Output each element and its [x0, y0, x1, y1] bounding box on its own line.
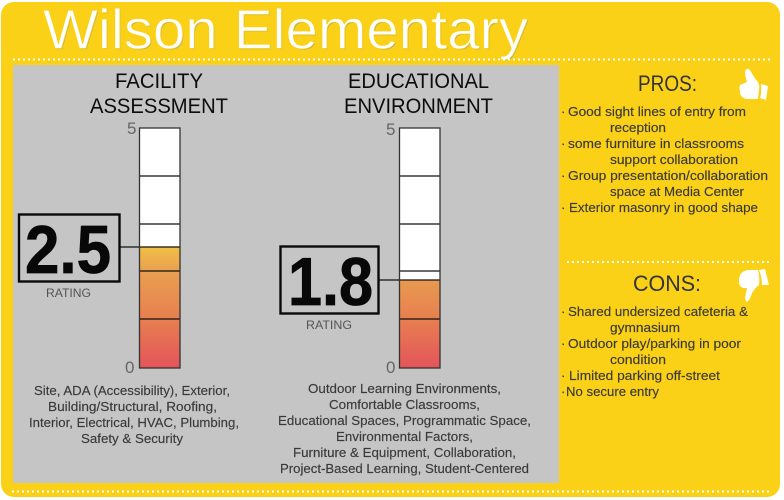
text: facility assessment categories: Site, ADA (Accessibility), Exterior,	[34, 383, 230, 398]
list: cons: No secure entry	[566, 384, 660, 399]
text: educational environment categories: Educational Spaces, Programmatic Space,	[278, 413, 531, 428]
chart: facility assessment gauge: 5	[127, 119, 136, 138]
list: cons: Shared undersized cafeteria &	[568, 304, 748, 319]
text: educational environment categories	[278, 381, 531, 476]
list: cons: ·	[561, 368, 565, 383]
heading: facility assessment	[90, 70, 228, 118]
text: facility assessment categories: Building/Structural, Roofing,	[48, 399, 217, 414]
icon: thumbs up	[740, 69, 768, 100]
list: pros: support collaboration	[610, 152, 738, 167]
list: pros: ·	[561, 200, 565, 215]
heading: educational environment	[344, 70, 493, 118]
chart: facility assessment gauge	[120, 119, 180, 377]
list: pros: Group presentation/collaboration	[568, 168, 768, 183]
heading: facility assessment: FACILITY	[115, 70, 203, 93]
title: Wilson Elementary	[44, 0, 529, 62]
callout: facility rating 2.5: 2.5	[25, 212, 111, 288]
list: pros: space at Media Center	[610, 184, 745, 199]
list: pros: ·	[561, 136, 565, 151]
text: educational environment categories: Environmental Factors,	[336, 429, 473, 444]
chart: facility assessment gauge: 0	[125, 358, 134, 377]
list: pros	[561, 104, 768, 215]
text: educational environment categories: Outdoor Learning Environments,	[308, 381, 501, 396]
icon: thumbs down	[739, 269, 769, 302]
callout: educational rating 1.8: RATING	[306, 318, 352, 332]
list: cons: gymnasium	[610, 320, 680, 335]
list: pros: reception	[610, 120, 666, 135]
heading: cons: CONS:	[633, 271, 701, 296]
text: educational environment categories: Furniture & Equipment, Collaboration,	[293, 445, 516, 460]
list: cons: Outdoor play/parking in poor	[568, 336, 742, 351]
list: pros: Exterior masonry in good shape	[569, 200, 758, 215]
panel: gray ratings panel	[13, 65, 559, 483]
heading: educational environment: ENVIRONMENT	[344, 95, 493, 118]
list: pros: Good sight lines of entry from	[568, 104, 746, 119]
chart: educational environment gauge	[379, 120, 440, 377]
list: cons: ·	[561, 384, 565, 399]
text: educational environment categories: Comfortable Classrooms,	[329, 397, 480, 412]
heading: pros: PROS:	[638, 71, 697, 96]
list: pros: ·	[561, 104, 565, 119]
chart: educational environment gauge: 0	[386, 358, 395, 377]
heading: educational environment: EDUCATIONAL	[348, 70, 489, 93]
callout: facility rating 2.5: RATING	[46, 286, 91, 300]
list: pros: ·	[561, 168, 565, 183]
chart: educational environment gauge: 5	[386, 120, 395, 139]
text: facility assessment categories: Interior, Electrical, HVAC, Plumbing,	[29, 415, 239, 430]
callout: educational rating 1.8: 1.8	[288, 244, 373, 320]
list: cons: ·	[561, 336, 565, 351]
text: facility assessment categories: Safety & Security	[81, 431, 184, 446]
list: cons: condition	[610, 352, 666, 367]
list: cons: ·	[561, 304, 565, 319]
list: pros: some furniture in classrooms	[568, 136, 745, 151]
list: cons	[561, 304, 748, 399]
text: educational environment categories: Project-Based Learning, Student-Centered	[280, 461, 529, 476]
list: cons: Limited parking off-street	[569, 368, 720, 383]
text: facility assessment categories	[29, 383, 239, 446]
heading: facility assessment: ASSESSMENT	[90, 95, 228, 118]
